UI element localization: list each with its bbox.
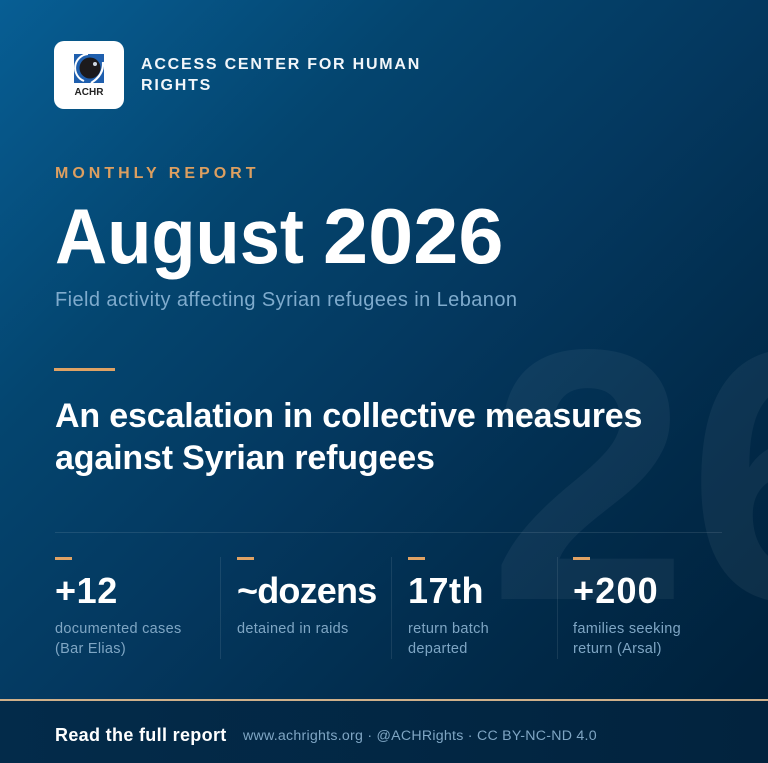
footer	[0, 699, 768, 763]
stat: documented cases: +12	[55, 570, 118, 611]
title: 2026	[323, 192, 503, 280]
headline	[55, 397, 642, 477]
footer credits: www.achrights.org · @ACHRights · CC BY-NC-ND 4.0	[243, 728, 597, 744]
stat: return batch	[408, 557, 489, 657]
headline: against Syrian refugees	[55, 439, 435, 477]
title: August	[55, 192, 304, 280]
organisation name	[141, 56, 421, 94]
subtitle: Field activity affecting Syrian refugees in Lebanon	[55, 289, 517, 311]
stat: return batch: departed	[408, 641, 468, 657]
stat: families seeking return: return (Arsal)	[573, 641, 662, 657]
title	[55, 192, 503, 280]
stat: return batch: 17th	[408, 570, 484, 611]
stat: documented cases: (Bar Elias)	[55, 641, 126, 657]
logo: ACHR	[75, 87, 104, 98]
stat: detained in raids	[237, 557, 376, 637]
organisation name: ACCESS CENTER FOR HUMAN	[141, 56, 421, 73]
headline: An escalation in collective measures	[55, 397, 642, 435]
label: monthly report: MONTHLY REPORT	[55, 165, 259, 182]
stat: return batch: return batch	[408, 621, 489, 637]
stat: families seeking return: families seeking	[573, 621, 681, 637]
organisation name: RIGHTS	[141, 76, 212, 94]
logo	[54, 41, 124, 109]
stat: families seeking return: +200	[573, 570, 659, 611]
stat: documented cases	[55, 557, 182, 657]
footer call to action: Read the full report	[55, 725, 227, 745]
accent rule	[54, 368, 115, 371]
stat: detained in raids: ~dozens	[237, 570, 376, 611]
stats divider	[55, 532, 722, 533]
stat: detained in raids: detained in raids	[237, 621, 349, 637]
stat: documented cases: documented cases	[55, 621, 182, 637]
